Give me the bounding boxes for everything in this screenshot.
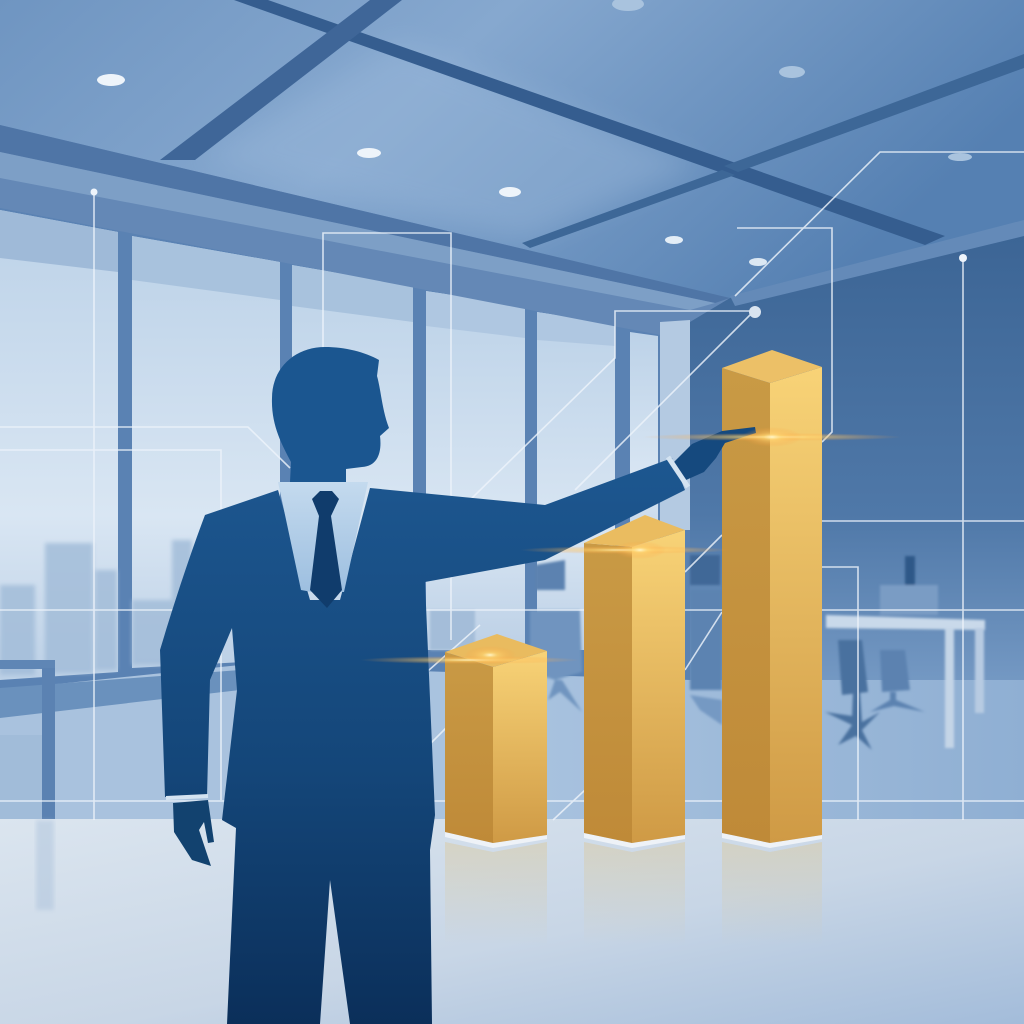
right wall — [690, 235, 1024, 700]
bar 3 — [722, 350, 822, 848]
tie — [310, 491, 342, 608]
shirt cuff at lower arm — [166, 796, 208, 798]
light flares on bars — [360, 427, 902, 664]
ceiling — [0, 0, 1024, 320]
head and neck — [272, 347, 389, 482]
city skyline through windows — [0, 540, 215, 675]
tabletop — [0, 819, 1024, 1024]
bar 2 — [584, 515, 685, 848]
background office furniture — [430, 555, 985, 750]
bar 1 — [445, 634, 547, 848]
shirt collar — [278, 482, 368, 592]
suit body and arm — [160, 458, 685, 1024]
lower hand — [173, 800, 214, 866]
left sill and low cabinet — [0, 660, 240, 820]
windows — [0, 200, 690, 700]
line nodes — [90, 188, 967, 318]
cabinet reflection on tabletop — [36, 820, 54, 910]
shirt cuff at pointing arm — [668, 457, 688, 487]
pointing hand — [674, 427, 756, 480]
floor — [0, 665, 1024, 830]
businessman silhouette — [160, 347, 756, 1024]
wall edge trim on right — [730, 220, 1024, 306]
ceiling beams and lights — [97, 0, 1024, 266]
window jamb — [660, 320, 690, 530]
network lines — [0, 152, 1024, 820]
bar reflections — [445, 842, 822, 945]
ceiling edge band — [0, 125, 730, 335]
